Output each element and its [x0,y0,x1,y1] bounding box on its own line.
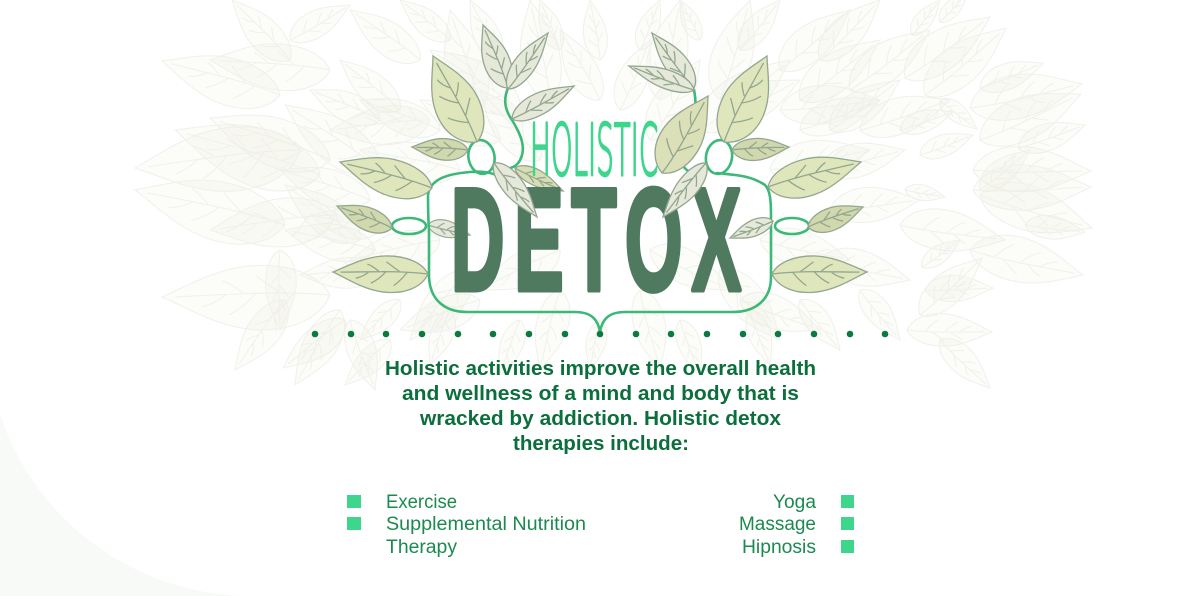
list: right therapies: Massage [739,514,816,535]
leaves overlapping title [486,85,725,224]
background leaf pattern [128,0,1099,397]
intro paragraph: and wellness of a mind and body that is [402,383,799,405]
intro paragraph [385,358,816,455]
list: right therapies [739,492,816,558]
intro paragraph: therapies include: [513,433,689,455]
list: left therapies: Therapy [386,537,458,558]
list: left therapies: Supplemental Nutrition [386,514,586,535]
dotted divider [312,331,888,337]
list: left therapies: Exercise [386,492,457,513]
decorative main leaves, right [626,26,867,293]
decorative main leaves, left [333,20,579,293]
background corner shape [0,414,240,596]
intro paragraph: Holistic activities improve the overall health [385,358,816,380]
list: left therapies [386,492,586,558]
list: right therapies: Yoga [773,492,816,513]
intro paragraph: wracked by addiction. Holistic detox [419,408,781,430]
bullets: right [841,495,854,553]
title: DETOX: DETOX [451,158,741,321]
lower left leaf behind title [426,216,472,243]
bullets: left [347,495,361,530]
vine frame around title [392,88,809,332]
list: right therapies: Hipnosis [742,537,816,558]
title: HOLISTIC: HOLISTIC [530,109,658,192]
